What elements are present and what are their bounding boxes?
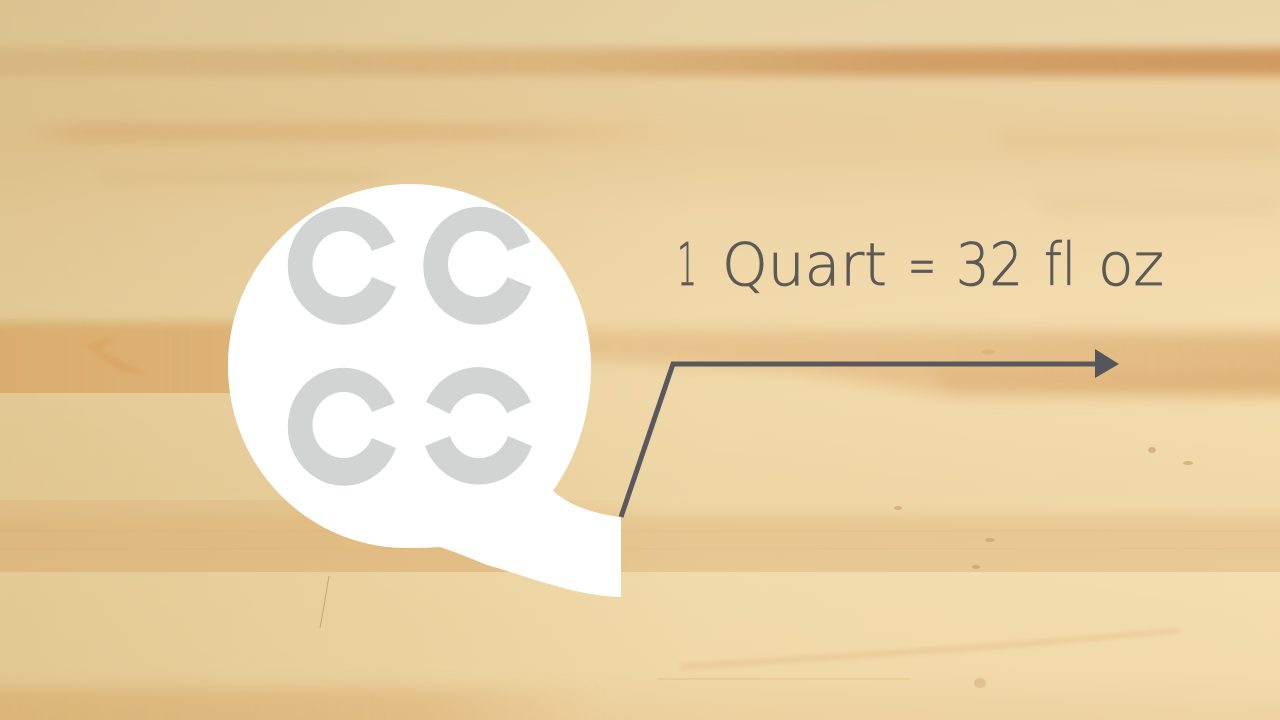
arrow bbox=[621, 349, 1119, 517]
conversion label: Quart bbox=[722, 230, 887, 299]
conversion label: fl bbox=[1044, 230, 1076, 299]
cup letter bottom right, partial bbox=[425, 367, 532, 485]
conversion label: 1 bbox=[677, 230, 697, 299]
conversion label: = bbox=[908, 230, 936, 299]
cup letter bottom left bbox=[288, 368, 396, 486]
conversion label: 32 bbox=[956, 230, 1023, 299]
conversion label bbox=[677, 230, 1164, 299]
cup letter top left bbox=[288, 207, 396, 325]
speech bubble bbox=[228, 184, 621, 597]
conversion label: oz bbox=[1098, 230, 1164, 299]
cup icons bbox=[288, 207, 532, 486]
cup letter top right bbox=[423, 207, 532, 325]
